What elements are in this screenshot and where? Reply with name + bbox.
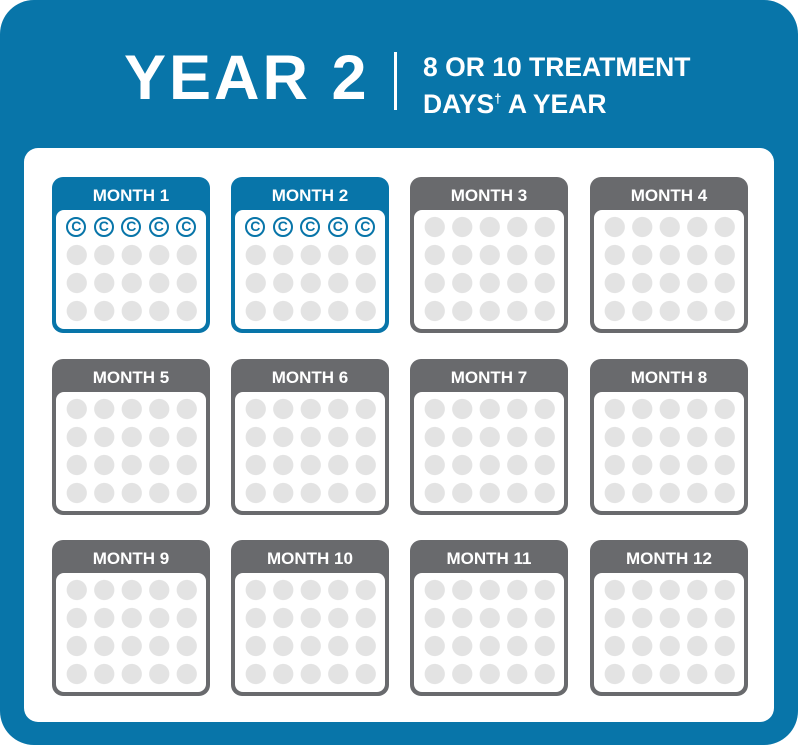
subtitle: 8 OR 10 TREATMENT — [423, 52, 690, 82]
calendar: month 7: MONTH 7 — [451, 368, 527, 387]
calendar: month 2: C — [250, 218, 260, 234]
calendar: month 2: C — [305, 218, 315, 234]
calendar: month 3 — [410, 177, 568, 333]
calendar: month 1 — [52, 177, 210, 333]
calendar: month 2 — [231, 177, 389, 333]
calendar: month 10: MONTH 10 — [267, 549, 353, 568]
calendar: month 8: MONTH 8 — [631, 368, 707, 387]
panel: calendar grid — [24, 148, 774, 722]
calendar: month 1: C — [126, 218, 136, 234]
calendar: month 9 — [52, 540, 210, 696]
calendar: month 1: C — [99, 218, 109, 234]
calendar: month 4 — [590, 177, 748, 333]
calendar: month 7 — [410, 359, 568, 515]
calendar: month 5 — [52, 359, 210, 515]
calendar: month 8 — [590, 359, 748, 515]
calendar: month 1: C — [71, 218, 81, 234]
calendar: month 12: MONTH 12 — [626, 549, 712, 568]
calendar: month 3: MONTH 3 — [451, 186, 527, 205]
calendar: month 6: MONTH 6 — [272, 368, 348, 387]
calendar: month 1: C — [181, 218, 191, 234]
divider — [394, 52, 397, 110]
calendar: month 2: C — [278, 218, 288, 234]
calendar: month 9: MONTH 9 — [93, 549, 169, 568]
title: YEAR 2: YEAR 2 — [124, 43, 370, 113]
calendar: month 5: MONTH 5 — [93, 368, 169, 387]
calendar: month 2: MONTH 2 — [272, 186, 348, 205]
calendar: month 4: MONTH 4 — [631, 186, 707, 205]
calendar: month 11 — [410, 540, 568, 696]
calendar: month 11: MONTH 11 — [446, 549, 532, 568]
calendar: month 1: MONTH 1 — [93, 186, 169, 205]
subtitle: DAYS† A YEAR — [423, 89, 606, 119]
calendar: month 1: C — [154, 218, 164, 234]
calendar: month 10 — [231, 540, 389, 696]
calendar: month 2: C — [333, 218, 343, 234]
calendar: month 6 — [231, 359, 389, 515]
calendar: month 12 — [590, 540, 748, 696]
subtitle — [423, 52, 690, 119]
calendar: month 2: C — [360, 218, 370, 234]
